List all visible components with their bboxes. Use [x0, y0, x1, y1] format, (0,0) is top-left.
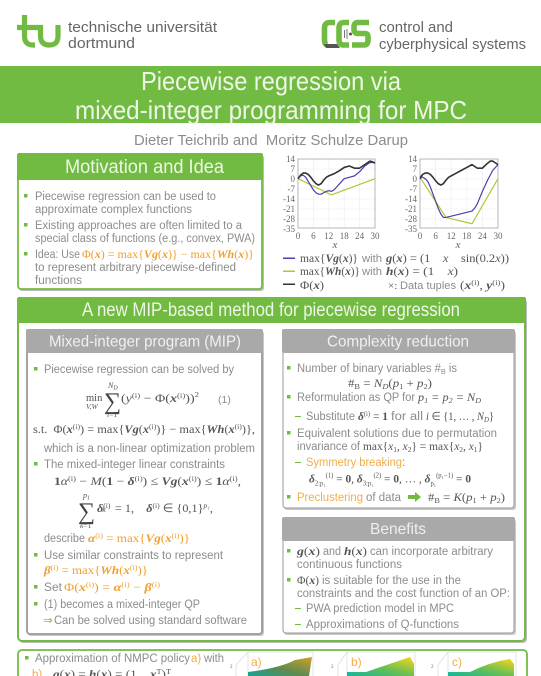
logo: CCS: [324, 20, 526, 53]
text: group name: [379, 20, 526, 53]
equation: sum delta: k: [102, 505, 106, 514]
panel: bottom application: [18, 650, 527, 676]
text: describe alpha: )}: [179, 531, 190, 545]
bullet: binary variables: p: [416, 378, 424, 390]
chart: right regression plot: [405, 154, 503, 251]
axis labels: -14: [283, 194, 295, 204]
equation: sum delta: p: [83, 491, 87, 500]
title: Piecewise regression via: [141, 66, 401, 96]
bullet: set phi: α: [114, 580, 122, 594]
bullet: set phi: (i): [86, 580, 95, 589]
equation: big-M: 1α: [216, 474, 229, 488]
bullet: solved by: Piecewise regression can be solved by: [44, 364, 234, 376]
text: university name: [68, 20, 217, 52]
bullet: preclustering: of data: [366, 492, 402, 504]
axis labels: 14: [408, 154, 418, 164]
sub-bullet: Q-functions: Approximations of Q-functions: [306, 619, 459, 631]
bullet: binary variables: is: [446, 363, 457, 375]
bullet: preclustering: [287, 492, 505, 505]
legend: black and data: (x: [460, 280, 470, 292]
legend: black and data: (i): [492, 278, 501, 287]
bullet: NMPC approximation: [25, 653, 224, 676]
axis labels: -14: [405, 194, 417, 204]
axis labels: 7: [412, 164, 418, 174]
bullet: preclustering: 1: [473, 496, 477, 505]
equation: big-M: (i): [68, 474, 77, 483]
axis labels: 0: [412, 174, 418, 184]
bullet: reformulation: p: [418, 392, 424, 404]
equation: big-M: 1α: [54, 474, 67, 488]
sub-bullet: substitute: Substitute: [306, 411, 355, 423]
bullet: suitable: [287, 573, 510, 600]
panel: complexity reduction: [282, 329, 516, 510]
sub-bullet: substitute: D: [483, 415, 489, 424]
constraint s.t.: (i): [149, 422, 157, 431]
bullet: equivalent solutions: } = max{: [411, 441, 454, 453]
constraint s.t.: ) = max{: [80, 422, 124, 436]
axis labels: -21: [405, 204, 417, 214]
equation 1: D: [112, 386, 118, 392]
equation 1: i=1: [107, 410, 117, 419]
bullet: binary variables: ): [428, 378, 432, 390]
bullet: suitable: Φ(x): [297, 573, 319, 587]
bullet: arbitrary functions: can incorporate arbitrary: [370, 546, 493, 558]
axis labels: 12: [447, 231, 456, 241]
sub-bullet: substitute: =: [370, 409, 382, 423]
equation: big-M: (i): [135, 474, 143, 483]
bullet: set phi: −: [130, 580, 145, 594]
bullet: NMPC approximation: T: [157, 667, 162, 676]
bullet: similar constraints: (i): [51, 563, 59, 572]
equation: sum delta: (i): [153, 501, 160, 510]
equation: sum delta: k=1: [80, 521, 92, 530]
legend: green: h(x) = (1 x): [386, 266, 458, 278]
bullet: equivalent solutions: max{x: [363, 441, 393, 453]
equation 1: 2: [195, 390, 199, 399]
constraint s.t.: )},: [242, 422, 255, 436]
bullet: preclustering: 2: [497, 496, 501, 505]
legend: blue: max{Vg(x)}: [300, 253, 358, 265]
sub-bullet: symmetry breaking: :: [402, 457, 405, 469]
equation 1: [86, 381, 231, 419]
bullet: binary variables: +: [403, 378, 417, 390]
title banner: [0, 66, 541, 125]
sub-bullet: substitute: i ∈ {1, … , N: [426, 411, 485, 423]
bullet: set phi: (i): [121, 580, 130, 589]
equation: sum delta: = 1, δ: [115, 501, 152, 515]
bullet: binary variables: [287, 363, 457, 391]
legend: blue: g(x) = (1 x sin(0.2 x)): [385, 253, 509, 265]
text: describe alpha: = max{: [103, 531, 146, 545]
sub-bullet: substitute: [295, 409, 494, 424]
legend: black and data: ×:: [388, 280, 397, 292]
heading: Motivation and Idea: [65, 157, 224, 178]
bullet: set phi: [34, 580, 161, 594]
bullet: equivalent solutions: ,: [463, 441, 469, 453]
bullet: preclustering: Preclustering: [297, 492, 363, 504]
equation: symmetry constraints: δ: [309, 472, 315, 486]
axis labels: 30: [494, 231, 503, 241]
bullet: equivalent solutions: ,: [397, 441, 403, 453]
bullet: equivalent solutions: }: [478, 441, 483, 453]
bullet: binary variables: Number of binary variables #: [297, 363, 444, 375]
legend: green: with: [361, 266, 382, 278]
bullet: idea: functions: [35, 275, 82, 287]
constraint s.t.: Vg(x: [124, 422, 149, 436]
axis labels: -35: [283, 224, 295, 234]
text: describe alpha: (i): [95, 531, 103, 540]
equation: big-M: ) ≤: [197, 474, 216, 488]
bullet: binary variables: B: [441, 367, 446, 376]
legend: green: max{Wh(x)}: [300, 266, 360, 278]
bullet: similar constraints: [34, 550, 224, 577]
curves: [298, 161, 375, 195]
sub-bullet: PWA model: PWA prediction model in MPC: [306, 603, 454, 615]
axis labels: -7: [410, 184, 417, 194]
icon: ccs mark: [324, 22, 369, 48]
chart legend: [283, 253, 509, 292]
bullet: arbitrary functions: continuous functions: [297, 559, 402, 571]
text: implication: Can be solved using standard software: [54, 615, 247, 627]
axis labels: 7: [290, 164, 296, 174]
chart: left regression plot: [283, 154, 380, 251]
bullet: binary variables: =: [360, 378, 374, 390]
bullet: idea: to represent arbitrary piecewise-defined: [35, 262, 236, 274]
axis labels: 18: [462, 231, 472, 241]
equation 1: (i): [132, 391, 141, 400]
axis labels: 24: [478, 231, 487, 241]
legend: black and data: Data tuples: [400, 280, 456, 292]
legend: black and data: y: [484, 280, 493, 292]
axis labels: -35: [405, 224, 417, 234]
sub-bullet: substitute: δ: [358, 409, 364, 423]
bullet: reformulation: = p: [428, 392, 449, 404]
axis labels: -21: [283, 204, 295, 214]
bullet: preclustering: +: [477, 492, 490, 504]
bullet: preclustering: =: [440, 492, 453, 504]
sub-bullet: substitute: }: [489, 411, 494, 423]
bullet: binary variables: p: [392, 378, 399, 390]
text: university name: technische universität: [68, 20, 217, 36]
axis labels: [283, 154, 380, 251]
equation: sum delta: (i): [103, 501, 111, 510]
text: describe alpha: [44, 531, 190, 545]
text: describe alpha: (i): [172, 531, 180, 540]
legend: black and data: (i): [471, 278, 480, 287]
bullet: binary variables: 2: [424, 382, 428, 391]
equation 1: (y: [121, 391, 131, 405]
bullet: set phi: (i): [152, 580, 161, 589]
equation: sum delta: 1: [87, 496, 90, 502]
bullet: NMPC approximation: a): [191, 653, 201, 665]
constraint s.t.: s.t. Φ(x: [33, 422, 73, 436]
axis labels: 0: [290, 174, 296, 184]
plot c: c): [452, 655, 462, 669]
bullet: arbitrary functions: g(x): [296, 544, 320, 558]
axis labels: 24: [355, 231, 365, 241]
bullet: binary variables: (: [388, 378, 393, 390]
sub-bullet: substitute: for all: [391, 411, 423, 423]
equation: big-M: −: [76, 474, 90, 488]
axis labels: 18: [340, 231, 349, 241]
plot c: [431, 652, 516, 676]
legend: black and data: ,: [480, 280, 483, 292]
bullet: existing approaches: [24, 220, 255, 245]
equation: big-M: ) ≤: [143, 474, 162, 488]
bullet: idea: Φ(x) = max{Vg(x)} − max{Wh(x)}: [82, 249, 254, 261]
axis labels: 30: [370, 231, 380, 241]
equation: symmetry constraints: (1): [326, 472, 334, 480]
legend: blue: with: [361, 253, 382, 265]
sub-bullet: substitute: 1: [382, 409, 388, 423]
constraint s.t.: (i): [235, 422, 242, 431]
equation: symmetry constraints: (p₁−1): [436, 472, 454, 480]
equation: symmetry constraints: p₁: [430, 480, 436, 488]
logo: TU Dortmund: [17, 15, 217, 52]
icon: tu mark: [17, 15, 58, 45]
bullet: similar constraints: = max{: [58, 563, 100, 577]
curves: [420, 161, 498, 224]
bullet: suitable: constraints and the cost function of an OP:: [297, 588, 510, 600]
plot b: 2: [331, 665, 334, 670]
authors: Dieter Teichrib and Moritz Schulze Darup: [134, 132, 408, 149]
panel: new MIP-based method: [17, 297, 527, 643]
bullet: binary variables: 1: [399, 382, 404, 391]
legend: black and data: ): [501, 280, 505, 292]
bullet: reformulation: D: [474, 396, 482, 405]
equation 1: x: [169, 391, 177, 405]
equation: sum delta: ∈ {0,1}: [160, 501, 203, 515]
title: mixed-integer programming for MPC: [75, 95, 467, 125]
heading: A new MIP-based method for piecewise regression: [82, 300, 460, 321]
legend: blue: [283, 253, 509, 265]
bullet: NMPC approximation: with: [203, 653, 224, 665]
axis labels: 14: [286, 154, 296, 164]
constraint s.t.: Wh(x: [207, 422, 234, 436]
panel: benefits: [282, 517, 516, 635]
axis labels: -28: [405, 214, 417, 224]
bullet: piecewise regression: Piecewise regression can be used to: [35, 191, 216, 203]
bullet: becomes QP: (1) becomes a mixed-integer QP: [44, 599, 200, 611]
axis labels: -28: [283, 214, 295, 224]
equation: symmetry constraints: (2): [373, 472, 382, 480]
plot b: b): [351, 655, 362, 669]
axis labels: 6: [311, 231, 316, 241]
equation 1: (i): [177, 391, 186, 400]
bullet: set phi: Set: [44, 582, 63, 594]
panel: motivation and idea: [17, 153, 264, 291]
equation: symmetry constraints: 2:p₁: [315, 480, 326, 488]
text: implication: ⇒: [43, 615, 53, 627]
icon: arrow: [408, 492, 421, 502]
text: non-linear: which is a non-linear optimization problem: [43, 443, 255, 455]
axis labels: 0: [418, 231, 423, 241]
plot a: 2: [230, 665, 233, 670]
bullet: preclustering: K(p: [453, 492, 472, 504]
text: university name: dortmund: [68, 36, 135, 52]
bullet: piecewise regression: approximate complex functions: [35, 204, 192, 216]
text: describe alpha: describe: [44, 533, 85, 545]
bullet: preclustering: #: [428, 492, 434, 504]
heading: Mixed-integer program (MIP): [49, 334, 241, 350]
bullet: reformulation: 1: [424, 396, 428, 405]
bullet: preclustering: ): [501, 492, 505, 504]
equation: big-M: (i): [230, 474, 238, 483]
bullet: NMPC approximation: T: [166, 667, 171, 676]
bullet: binary variables: D: [381, 382, 389, 391]
equation: big-M: (i): [189, 474, 197, 483]
bullet: equivalent solutions: [287, 428, 497, 454]
bullet: preclustering: p: [489, 492, 497, 504]
legend: black and data: [283, 278, 505, 292]
equation: symmetry constraints: 3:p₁: [363, 480, 373, 488]
bullet: reformulation: [287, 392, 482, 405]
text: group name: cyberphysical systems: [379, 37, 526, 53]
legend: green: [283, 266, 458, 278]
bullet: binary variables: N: [373, 378, 384, 390]
bullet: set phi: ) =: [94, 580, 114, 594]
bullet: arbitrary functions: h(x): [344, 544, 367, 558]
bullet: similar constraints: Wh(x: [100, 563, 129, 577]
constraint s.t.: (i): [73, 422, 81, 431]
plot a: [230, 652, 313, 676]
plot b: [331, 652, 415, 676]
equation: symmetry constraints: = 0,: [336, 472, 354, 486]
equation 1: V,W: [86, 402, 98, 411]
bullet: reformulation: 2: [449, 396, 453, 405]
equation: sum delta: [78, 491, 213, 530]
equation: sum delta: ∑: [78, 499, 95, 525]
bullet: linear constraints: The mixed-integer linear constraints: [44, 459, 225, 471]
equation: big-M: M(1 − δ: [90, 474, 134, 488]
bullet: NMPC approximation: Approximation of NMPC policy: [35, 653, 190, 665]
equation: symmetry constraints: = 0, … ,: [384, 472, 423, 486]
equation 1: N: [108, 381, 113, 390]
bullet: equivalent solutions: x: [453, 441, 460, 453]
equation: symmetry constraints: = 0: [456, 472, 471, 486]
bullet: idea: [24, 249, 254, 287]
text: describe alpha: Vg(x: [146, 531, 171, 545]
equation 1: − Φ(: [140, 391, 170, 405]
axis labels: x: [332, 239, 338, 251]
constraint s.t.: )} − max{: [156, 422, 207, 436]
axis labels: x: [455, 239, 461, 251]
bullet: equivalent solutions: x: [468, 441, 475, 453]
bullet: preclustering: B: [434, 496, 440, 505]
equation 1: )): [185, 391, 195, 405]
bullet: set phi: Φ(x: [64, 580, 85, 594]
bullet: equivalent solutions: 2: [459, 445, 463, 454]
equation: sum delta: ,: [210, 501, 213, 515]
bullet: reformulation: Reformulation as QP for: [297, 392, 415, 404]
axis labels: 12: [324, 231, 333, 241]
axis labels: -7: [288, 184, 295, 194]
bullet: arbitrary functions: [287, 544, 493, 571]
equation 1: ∑: [104, 389, 121, 415]
plot c: 2: [431, 665, 434, 670]
sub-bullet: symmetry breaking: Symmetry breaking: [306, 457, 402, 469]
bullet: suitable: is suitable for the use in the: [322, 575, 461, 587]
axis labels: 6: [433, 231, 438, 241]
bullet: arbitrary functions: and: [323, 546, 341, 558]
bullet: existing approaches: special class of functions (e.g., convex, PWA): [35, 233, 255, 245]
sub-bullet: substitute: (i): [364, 410, 371, 418]
bullet: equivalent solutions: 2: [408, 445, 412, 454]
equation 1: (1): [218, 394, 231, 406]
equation: symmetry constraints: δ: [357, 472, 363, 486]
panel: mixed-integer program: [26, 329, 264, 636]
bullet: equivalent solutions: Equivalent solutions due to permutation: [297, 428, 497, 440]
equation: sum delta: p₁: [202, 501, 210, 510]
bullet: similar constraints: )}: [137, 563, 148, 577]
axis labels: [405, 154, 503, 251]
legend: black and data: Φ(x): [300, 280, 324, 292]
text: group name: control and: [379, 20, 453, 36]
plot a: a): [251, 655, 262, 669]
bullet: binary variables: #: [348, 378, 354, 390]
equation: sum delta: δ: [97, 501, 103, 515]
bullet: similar constraints: (i): [130, 563, 138, 572]
axis labels: 0: [296, 231, 301, 241]
bullet: equivalent solutions: 1: [474, 445, 478, 454]
bullet: similar constraints: β: [43, 563, 52, 577]
bullet: equivalent solutions: invariance of: [297, 441, 361, 453]
bullet: equivalent solutions: x: [402, 441, 409, 453]
bullet: equivalent solutions: 1: [393, 445, 397, 454]
bullet: set phi: β: [143, 580, 153, 594]
heading: Benefits: [370, 521, 426, 538]
bullet: binary variables: B: [354, 382, 360, 391]
bullet: idea: Idea: Use: [35, 249, 80, 261]
equation: big-M: ,: [238, 474, 241, 488]
equation: big-M: Vg(x: [162, 474, 188, 488]
bullet: existing approaches: Existing approaches are often limited to a: [35, 220, 243, 232]
title: [75, 66, 467, 125]
bullet: reformulation: = N: [453, 392, 477, 404]
bullet: piecewise regression: [24, 191, 216, 216]
text: describe alpha: α: [88, 531, 96, 545]
equation: symmetry constraints: δ: [425, 472, 430, 486]
equation 1: min: [86, 393, 103, 404]
bullet: similar constraints: Use similar constraints to represent: [44, 550, 224, 562]
heading: Complexity reduction: [327, 334, 469, 350]
